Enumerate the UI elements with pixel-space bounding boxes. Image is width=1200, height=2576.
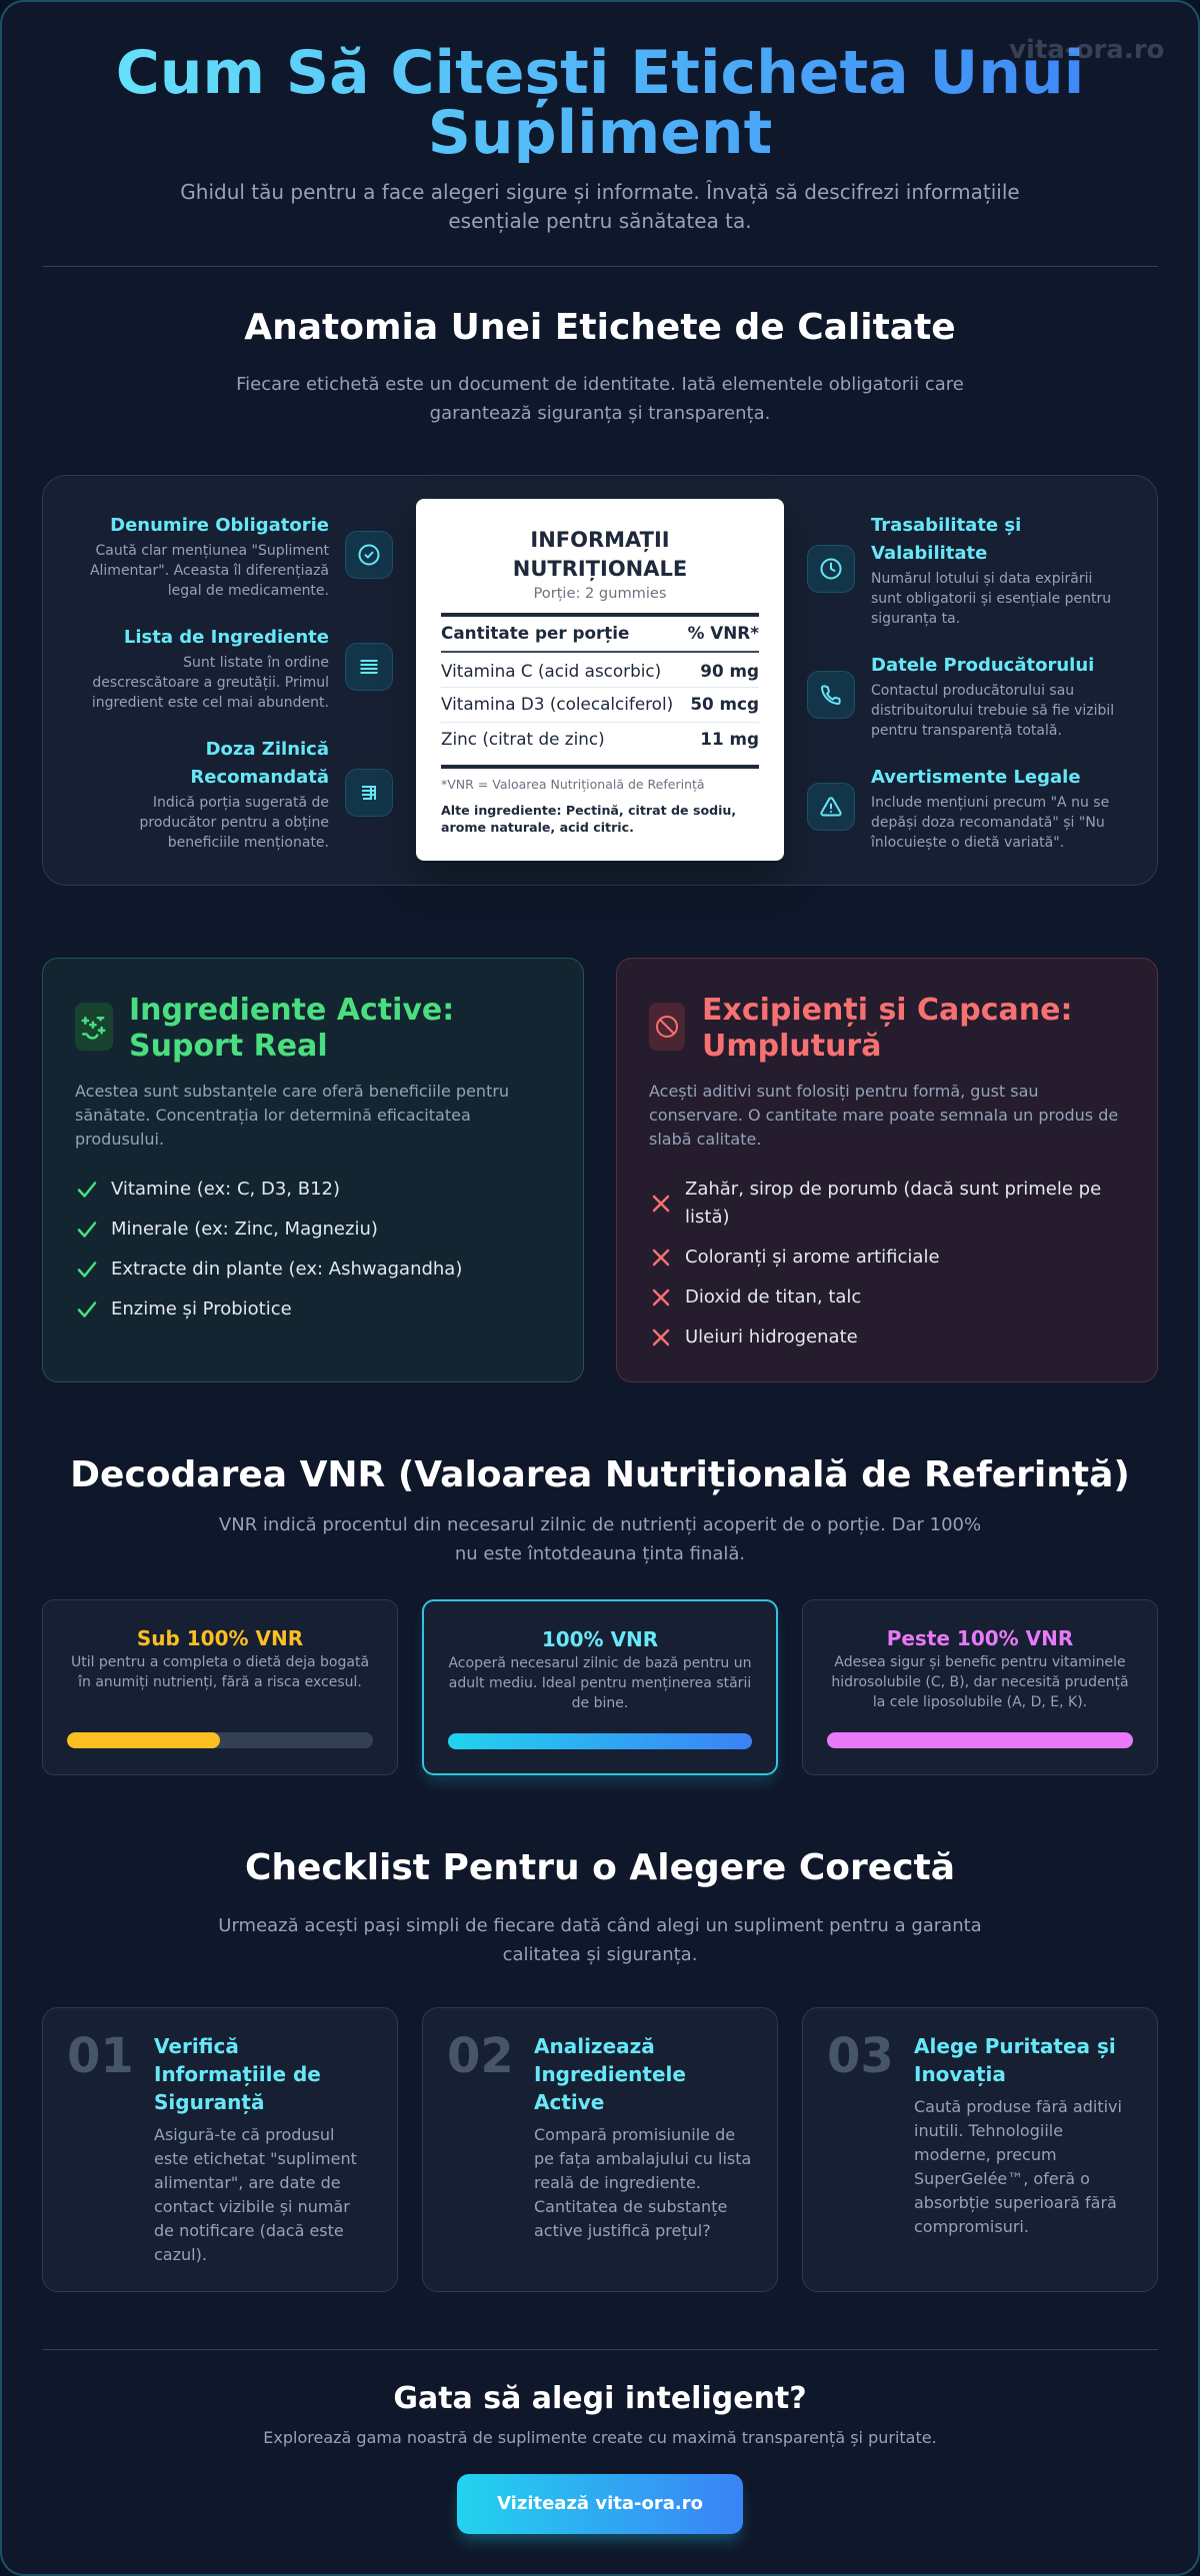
annotation text: sunt obligatorii și esențiale pentru bbox=[871, 591, 1111, 607]
card text: Acești aditivi sunt folosiți pentru formă, gust sau bbox=[649, 1082, 1039, 1101]
card: over 100 bbox=[802, 1599, 1158, 1775]
checklist bbox=[78, 1179, 462, 1319]
step text: alimentar", are date de bbox=[154, 2173, 341, 2192]
card text: în anumiți nutrienți, fără a risca excesul. bbox=[78, 1674, 362, 1690]
annotation: trasabilitate bbox=[807, 515, 1111, 627]
annotation text: producător pentru a obține bbox=[140, 815, 329, 831]
icon: phone bbox=[807, 671, 855, 719]
annotation: avertismente legale bbox=[807, 767, 1109, 851]
annotation: doza zilnica bbox=[140, 739, 393, 851]
label header row: % VNR* bbox=[688, 623, 759, 643]
step title: Informațiile de bbox=[154, 2062, 321, 2086]
card text bbox=[448, 1655, 752, 1711]
step title: Analizează bbox=[534, 2034, 655, 2058]
label row vitamin c: Vitamina C (acid ascorbic) bbox=[441, 661, 661, 681]
annotation text: Sunt listate în ordine bbox=[183, 655, 329, 671]
annotation: denumire obligatorie bbox=[90, 515, 393, 599]
intro: anatomy: Fiecare etichetă este un document de identitate. Iată elementele obligatorii care bbox=[236, 374, 964, 395]
label title: NUTRIȚIONALE bbox=[513, 557, 687, 581]
panel: label anatomy bbox=[42, 475, 1158, 886]
card text bbox=[831, 1654, 1129, 1710]
step text: reală de ingrediente. bbox=[534, 2173, 701, 2192]
intro: VNR: nu este întotdeauna ținta finală. bbox=[455, 1543, 745, 1564]
card title: 100% VNR bbox=[542, 1627, 658, 1651]
item: Vitamine (ex: C, D3, B12) bbox=[111, 1179, 340, 1200]
label footnote: *VNR = Valoarea Nutrițională de Referință bbox=[441, 777, 705, 792]
subtitle bbox=[180, 180, 1020, 233]
annotation text: descrescătoare a greutății. Primul bbox=[92, 675, 329, 691]
label row vitamin d3: Vitamina D3 (colecalciferol) bbox=[441, 694, 673, 714]
button: Vizitează vita-ora.ro bbox=[497, 2493, 703, 2514]
annotation title: Trasabilitate și bbox=[871, 515, 1021, 536]
subtitle: esențiale pentru sănătatea ta. bbox=[448, 208, 752, 232]
step text: Cantitatea de substanțe bbox=[534, 2197, 727, 2216]
step number: 02 bbox=[447, 2028, 514, 2084]
label other ingredients bbox=[441, 803, 736, 835]
annotation text: înlocuiește o dietă variată". bbox=[871, 835, 1064, 851]
card title bbox=[129, 993, 454, 1064]
card text: Adesea sigur și benefic pentru vitaminele bbox=[834, 1654, 1126, 1670]
annotation text: Numărul lotului și data expirării bbox=[871, 571, 1092, 587]
annotation title: Doza Zilnică bbox=[206, 739, 329, 760]
annotation text: pentru transparență totală. bbox=[871, 723, 1062, 739]
label serving: Porție: 2 gummies bbox=[533, 585, 667, 602]
annotation text: Contactul producătorului sau bbox=[871, 683, 1074, 699]
step number: 01 bbox=[67, 2028, 134, 2084]
annotation text: Include mențiuni precum "A nu se bbox=[871, 795, 1109, 811]
label row vitamin c bbox=[441, 661, 759, 681]
annotation text bbox=[870, 795, 1109, 851]
step title bbox=[534, 2032, 686, 2116]
annotation text bbox=[871, 571, 1111, 627]
step text bbox=[154, 2123, 357, 2267]
step text: cazul). bbox=[154, 2245, 207, 2264]
step text: este etichetat "supliment bbox=[154, 2149, 357, 2168]
step title: Siguranță bbox=[154, 2090, 264, 2114]
annotation text bbox=[90, 543, 329, 599]
card title: Excipienți și Capcane: bbox=[702, 993, 1072, 1028]
progress bar bbox=[827, 1732, 1133, 1748]
step text: Compară promisiunile de bbox=[534, 2125, 735, 2144]
panel: active ingredients bbox=[42, 958, 584, 1382]
item: listă) bbox=[685, 1207, 730, 1228]
annotation text bbox=[140, 795, 329, 851]
label row vitamin c: 90 mg bbox=[700, 661, 759, 681]
card: under 100 bbox=[42, 1599, 398, 1775]
annotation text: Caută clar mențiunea "Supliment bbox=[96, 543, 329, 559]
label title: INFORMAȚII bbox=[530, 528, 670, 552]
card text: la cele liposolubile (A, D, E, K). bbox=[873, 1694, 1087, 1710]
step text: Caută produse fără aditivi bbox=[914, 2097, 1122, 2116]
card text: hidrosolubile (C, B), dar necesită prudență bbox=[831, 1674, 1129, 1690]
annotation title: Datele Producătorului bbox=[871, 655, 1094, 676]
label row zinc bbox=[441, 729, 759, 749]
step text: compromisuri. bbox=[914, 2217, 1029, 2236]
intro: checklist: Urmează acești pași simpli de fiecare dată când alegi un supliment pentru a garanta bbox=[218, 1915, 982, 1936]
card title: Peste 100% VNR bbox=[887, 1626, 1073, 1650]
step title: Inovația bbox=[914, 2062, 1006, 2086]
icon: check circle bbox=[345, 531, 393, 579]
subtitle: Ghidul tău pentru a face alegeri sigure și informate. Învață să descifrezi informațiile bbox=[180, 180, 1020, 204]
card title: Sub 100% VNR bbox=[137, 1626, 303, 1650]
card text bbox=[649, 1082, 1118, 1149]
card text: Acoperă necesarul zilnic de bază pentru un bbox=[448, 1655, 752, 1671]
annotation text: legal de medicamente. bbox=[168, 583, 329, 599]
card text: slabă calitate. bbox=[649, 1130, 761, 1149]
step title bbox=[914, 2032, 1116, 2088]
exclusion list bbox=[652, 1179, 1101, 1347]
label row zinc: 11 mg bbox=[700, 729, 759, 749]
annotation text bbox=[92, 655, 329, 711]
card text bbox=[71, 1654, 369, 1690]
icon: smile with sparkles bbox=[75, 1003, 113, 1051]
label header row: Cantitate per porție bbox=[441, 623, 629, 643]
icon: clock bbox=[807, 545, 855, 593]
item: Dioxid de titan, talc bbox=[685, 1287, 861, 1307]
heading: anatomy: Anatomia Unei Etichete de Calitate bbox=[244, 307, 956, 348]
label header row bbox=[441, 623, 759, 643]
step text: pe fața ambalajului cu lista bbox=[534, 2149, 751, 2168]
step text: inutili. Tehnologiile bbox=[914, 2121, 1063, 2140]
icon: lines bbox=[345, 643, 393, 691]
annotation title bbox=[871, 515, 1021, 564]
footer heading: Gata să alegi inteligent? bbox=[393, 2381, 807, 2416]
annotation text bbox=[871, 683, 1114, 739]
footer text: Explorează gama noastră de suplimente create cu maximă transparență și puritate. bbox=[263, 2428, 937, 2447]
card text: produsului. bbox=[75, 1130, 164, 1149]
step card 02 bbox=[422, 2007, 778, 2292]
card title: Umplutură bbox=[702, 1029, 881, 1064]
label other ingredients: arome naturale, acid citric. bbox=[441, 820, 634, 835]
intro: VNR: VNR indică procentul din necesarul zilnic de nutrienți acoperit de o porție. Dar 100% bbox=[219, 1514, 981, 1535]
card text: Acestea sunt substanțele care oferă beneficiile pentru bbox=[75, 1082, 509, 1101]
footer divider bbox=[43, 2349, 1158, 2350]
annotation title: Avertismente Legale bbox=[871, 767, 1081, 788]
step text: moderne, precum bbox=[914, 2145, 1057, 2164]
heading: VNR: Decodarea VNR (Valoarea Nutrițională de Referință) bbox=[70, 1454, 1130, 1495]
step text: absorbție superioară fără bbox=[914, 2193, 1117, 2212]
annotation: lista de ingrediente bbox=[92, 627, 393, 711]
title bbox=[42, 43, 1158, 163]
label row zinc: Zinc (citrat de zinc) bbox=[441, 729, 605, 749]
annotation title: Lista de Ingrediente bbox=[124, 627, 329, 648]
item: Zahăr, sirop de porumb (dacă sunt primele pe bbox=[685, 1179, 1101, 1200]
step text: SuperGelée™, oferă o bbox=[914, 2169, 1090, 2188]
card text: adult mediu. Ideal pentru menținerea stării bbox=[449, 1675, 751, 1691]
progress bar bbox=[448, 1733, 752, 1749]
card text: sănătate. Concentrația lor determină eficacitatea bbox=[75, 1106, 471, 1125]
item: Uleiuri hidrogenate bbox=[685, 1326, 858, 1347]
annotation text: beneficiile menționate. bbox=[168, 835, 329, 851]
item: Extracte din plante (ex: Ashwagandha) bbox=[111, 1259, 462, 1280]
intro: anatomy: garantează siguranța și transparența. bbox=[430, 403, 770, 424]
step card 03 bbox=[802, 2007, 1158, 2292]
progress bar bbox=[67, 1732, 373, 1748]
card text: Util pentru a completa o dietă deja bogată bbox=[71, 1654, 369, 1670]
step text bbox=[534, 2123, 751, 2243]
label row vitamin d3: 50 mcg bbox=[690, 694, 759, 714]
item: Enzime și Probiotice bbox=[111, 1298, 292, 1319]
card title bbox=[702, 993, 1072, 1064]
intro: checklist: calitatea și siguranța. bbox=[503, 1944, 697, 1965]
card text: conservare. O cantitate mare poate semnala un produs de bbox=[649, 1106, 1118, 1125]
icon: warning triangle bbox=[807, 783, 855, 831]
card title: Suport Real bbox=[129, 1029, 328, 1064]
card title: Ingrediente Active: bbox=[129, 993, 454, 1028]
step title: Ingredientele bbox=[534, 2062, 686, 2086]
panel: excipients bbox=[616, 958, 1158, 1382]
title: Cum Să Citești Eticheta Unui bbox=[116, 38, 1084, 108]
header divider bbox=[43, 266, 1158, 267]
annotation text: depăși doza recomandată" și "Nu bbox=[871, 815, 1105, 831]
annotation title: Denumire Obligatorie bbox=[110, 515, 329, 536]
step title: Alege Puritatea și bbox=[914, 2034, 1116, 2058]
item: Coloranți și arome artificiale bbox=[685, 1247, 940, 1268]
label title bbox=[513, 528, 687, 582]
step title bbox=[154, 2032, 321, 2116]
intro: checklist bbox=[42, 1912, 1158, 1970]
step title: Verifică bbox=[154, 2034, 239, 2058]
annotation text: distribuitorului trebuie să fie vizibil bbox=[871, 703, 1114, 719]
annotation title: Recomandată bbox=[190, 767, 329, 788]
annotation title bbox=[190, 739, 329, 788]
card: exactly 100 bbox=[422, 1599, 778, 1775]
heading: checklist: Checklist Pentru o Alegere Corectă bbox=[245, 1847, 955, 1888]
annotation text: Indică porția sugerată de bbox=[153, 795, 329, 811]
step text: active justifică prețul? bbox=[534, 2221, 711, 2240]
intro: VNR bbox=[219, 1514, 981, 1564]
watermark: vita-ora.ro bbox=[1009, 35, 1164, 65]
intro: anatomy bbox=[236, 374, 964, 424]
step text: contact vizibile și număr bbox=[154, 2197, 350, 2216]
annotation text: ingredient este cel mai abundent. bbox=[92, 695, 329, 711]
icon: ban bbox=[649, 1003, 685, 1051]
step text bbox=[914, 2095, 1122, 2239]
annotation: datele producatorului bbox=[807, 655, 1114, 739]
step text: Asigură-te că produsul bbox=[154, 2125, 334, 2144]
label other ingredients: Alte ingrediente: Pectină, citrat de sodiu, bbox=[441, 803, 736, 818]
icon: dosage list bbox=[345, 769, 393, 817]
annotation title: Valabilitate bbox=[871, 543, 987, 564]
annotation text: Alimentar". Aceasta îl diferențiază bbox=[90, 563, 329, 579]
card text bbox=[75, 1082, 509, 1149]
step card 01 bbox=[42, 2007, 398, 2292]
nutrition label card bbox=[416, 499, 784, 861]
step number: 03 bbox=[827, 2028, 894, 2084]
button bbox=[457, 2474, 743, 2534]
step title: Active bbox=[534, 2090, 604, 2114]
card text: de bine. bbox=[572, 1695, 628, 1711]
title: Supliment bbox=[428, 98, 772, 168]
annotation text: siguranța ta. bbox=[871, 611, 960, 627]
item bbox=[652, 1179, 1101, 1228]
step text: de notificare (dacă este bbox=[154, 2221, 344, 2240]
item: Minerale (ex: Zinc, Magneziu) bbox=[111, 1219, 378, 1240]
